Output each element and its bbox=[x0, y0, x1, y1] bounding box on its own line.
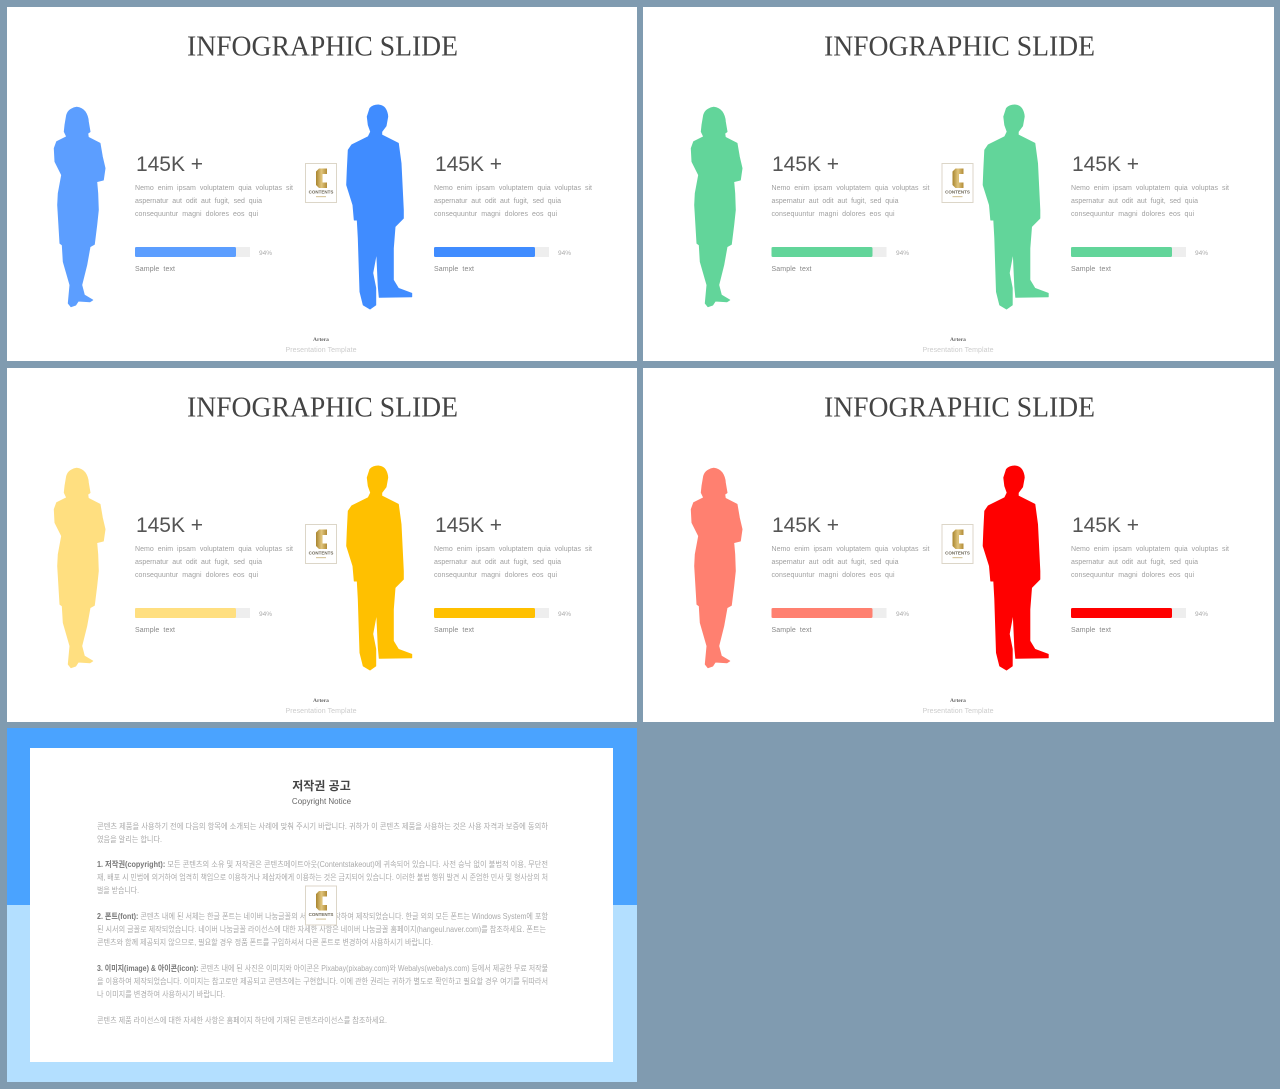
stat block: right: Sample text bbox=[434, 266, 474, 273]
stat block: left: consequuntur magni dolores eos qui bbox=[772, 572, 895, 579]
stat block: right: 94% bbox=[558, 611, 571, 618]
stat block: right: aspernatur aut odit aut fugit, sed quia bbox=[434, 198, 561, 205]
stat block: right: Nemo enim ipsam voluptatem quia voluptas sit bbox=[434, 546, 592, 553]
icon: man silhouette bbox=[347, 105, 412, 309]
icon: woman silhouette bbox=[54, 468, 105, 668]
stat block: left: 145K + bbox=[772, 514, 839, 537]
stat block: left: aspernatur aut odit aut fugit, sed quia bbox=[135, 198, 262, 205]
stat block: right: aspernatur aut odit aut fugit, sed quia bbox=[434, 559, 561, 566]
stat block: left: consequuntur magni dolores eos qui bbox=[135, 211, 258, 218]
stat block: left: aspernatur aut odit aut fugit, sed quia bbox=[135, 559, 262, 566]
stat block: left: Nemo enim ipsam voluptatem quia voluptas sit bbox=[772, 546, 930, 553]
footer: Presentation Template bbox=[286, 708, 357, 715]
icon: man silhouette bbox=[983, 105, 1048, 309]
notice section 3 bbox=[97, 963, 548, 999]
notice section 2: 된 시서의 글꼴로 제작되었습니다. 네이버 나눔글꼴 라이선스에 대한 자세한 사항은 네이버 나눔글꼴 홈페이지(hangeul.naver.com)를 참조하세요. 폰트는 bbox=[97, 924, 546, 934]
notice section 2: 콘텐츠와 함께 제공되지 않으므로, 필요할 경우 정품 폰트를 구입하셔서 다른 폰트로 변경하여 사용하시기 바랍니다. bbox=[97, 937, 433, 947]
title: INFOGRAPHIC SLIDE bbox=[187, 392, 458, 424]
icon: logo bbox=[306, 524, 336, 564]
notice section 3: 을 이용하여 제작되었습니다. 이미지는 참고로만 제공되고 콘텐츠에는 구현합니다. 이에 관한 권리는 귀하가 별도로 확인하고 필요할 경우 여기를 뒤따라서 bbox=[97, 976, 548, 986]
notice section 3: 나 이미지를 변경하여 사용하시기 바랍니다. bbox=[97, 989, 225, 999]
notice intro: 콘텐츠 제품을 사용하기 전에 다음의 항목에 소개되는 사례에 맞춰 주시기 바랍니다. 귀하가 이 콘텐츠 제품을 사용하는 것은 사용 자격과 보증에 동의하 bbox=[97, 821, 549, 831]
stat block: right: 145K + bbox=[435, 514, 502, 537]
stat block: left: aspernatur aut odit aut fugit, sed quia bbox=[772, 559, 899, 566]
notice section 2: 2. 폰트(font): 콘텐츠 내에 된 서체는 한글 폰트는 네이버 나눔글꼴의 서체들로 제작하여 제작되었습니다. 한글 외의 모든 폰트는 Windows System에 포함 bbox=[97, 911, 549, 921]
stat block: right: consequuntur magni dolores eos qui bbox=[434, 572, 557, 579]
icon: logo bbox=[306, 164, 336, 202]
stat block: right: 94% bbox=[1195, 611, 1208, 618]
panel: copyright notice bbox=[7, 728, 637, 1082]
stat block: left: 145K + bbox=[772, 153, 839, 176]
stat block: left: Nemo enim ipsam voluptatem quia voluptas sit bbox=[772, 185, 930, 192]
stat block: right bbox=[1071, 514, 1229, 634]
icon: woman silhouette bbox=[691, 468, 742, 668]
stat block: left bbox=[135, 514, 293, 634]
stat block: left: 145K + bbox=[136, 514, 203, 537]
stat block: left bbox=[772, 153, 930, 273]
stat block: right: Sample text bbox=[434, 627, 474, 634]
stat block: left: 94% bbox=[896, 250, 909, 257]
stat block: right bbox=[434, 153, 592, 273]
title: INFOGRAPHIC SLIDE bbox=[187, 32, 458, 62]
notice subheading: Copyright Notice bbox=[292, 797, 352, 806]
stat block: left: consequuntur magni dolores eos qui bbox=[772, 211, 895, 218]
stat block: right: 145K + bbox=[1072, 514, 1139, 537]
footer: Presentation Template bbox=[922, 347, 994, 354]
footer bbox=[922, 698, 994, 715]
stat block: right: 145K + bbox=[435, 153, 502, 176]
stat block: left: 94% bbox=[259, 250, 272, 257]
stat block: right: 145K + bbox=[1072, 153, 1139, 176]
panel: red slide bbox=[643, 368, 1274, 722]
notice section 1: 1. 저작권(copyright): 모든 콘텐츠의 소유 및 저작권은 콘텐츠메이트아웃(Contentstakeout)에 귀속되어 있습니다. 사전 승낙 없이 불법적 이용, 무단전 bbox=[97, 859, 548, 869]
stat block: right: aspernatur aut odit aut fugit, sed quia bbox=[1071, 559, 1198, 566]
stat block: right bbox=[1071, 153, 1229, 273]
stat block: right: aspernatur aut odit aut fugit, sed quia bbox=[1071, 198, 1198, 205]
panel: yellow slide bbox=[7, 368, 637, 722]
footer: Artera bbox=[950, 698, 966, 704]
notice section 2 bbox=[97, 911, 549, 947]
notice section 1: 재, 배포 시 민법에 의거하여 엄격히 책임으로 이용하거나 제삼자에게 이용하는 것은 금지되어 있습니다. 이러한 불법 행위 발견 시 준엄한 민사 및 형사상의 처 bbox=[97, 872, 548, 882]
icon: logo bbox=[306, 886, 336, 925]
stat block: right: 94% bbox=[1195, 250, 1208, 257]
stat block: left: Nemo enim ipsam voluptatem quia voluptas sit bbox=[135, 546, 293, 553]
footer: Artera bbox=[950, 337, 966, 343]
stat block: right bbox=[434, 514, 592, 634]
stat block: right: consequuntur magni dolores eos qui bbox=[1071, 572, 1194, 579]
icon: logo bbox=[942, 164, 973, 202]
notice intro: 였음을 알리는 합니다. bbox=[97, 834, 162, 844]
stat block: right: Sample text bbox=[1071, 266, 1111, 273]
icon: woman silhouette bbox=[54, 107, 105, 307]
icon: logo bbox=[942, 524, 973, 564]
footer: Presentation Template bbox=[286, 347, 357, 354]
icon: man silhouette bbox=[347, 466, 412, 670]
stat block: left: 94% bbox=[259, 611, 272, 618]
stat block: left: 94% bbox=[896, 611, 909, 618]
panel: green slide bbox=[643, 7, 1274, 361]
stat block: right: Sample text bbox=[1071, 627, 1111, 634]
title: INFOGRAPHIC SLIDE bbox=[824, 32, 1095, 62]
stat block: right: Nemo enim ipsam voluptatem quia voluptas sit bbox=[1071, 185, 1229, 192]
footer bbox=[922, 337, 994, 354]
notice section 1 bbox=[97, 859, 548, 895]
stat block: right: Nemo enim ipsam voluptatem quia voluptas sit bbox=[1071, 546, 1229, 553]
stat block: right: Nemo enim ipsam voluptatem quia voluptas sit bbox=[434, 185, 592, 192]
stat block: left: Sample text bbox=[772, 627, 812, 634]
notice heading: 저작권 공고 bbox=[292, 778, 351, 793]
panel: blue slide bbox=[7, 7, 637, 361]
footer: Presentation Template bbox=[922, 708, 994, 715]
stat block: left: consequuntur magni dolores eos qui bbox=[135, 572, 258, 579]
stat block: left: Sample text bbox=[135, 266, 175, 273]
stat block: left: Nemo enim ipsam voluptatem quia voluptas sit bbox=[135, 185, 293, 192]
footer bbox=[286, 337, 357, 354]
stat block: left: aspernatur aut odit aut fugit, sed quia bbox=[772, 198, 899, 205]
icon: woman silhouette bbox=[691, 107, 742, 307]
footer bbox=[286, 698, 357, 715]
stat block: left bbox=[772, 514, 930, 634]
notice section 1: 벌을 받습니다. bbox=[97, 885, 139, 895]
stat block: left bbox=[135, 153, 293, 273]
stat block: right: consequuntur magni dolores eos qui bbox=[434, 211, 557, 218]
footer: Artera bbox=[313, 337, 329, 343]
title: INFOGRAPHIC SLIDE bbox=[824, 392, 1095, 424]
stat block: left: 145K + bbox=[136, 153, 203, 176]
stat block: left: Sample text bbox=[772, 266, 812, 273]
notice intro bbox=[97, 821, 549, 844]
notice closing line: 콘텐츠 제품 라이선스에 대한 자세한 사항은 홈페이지 하단에 기재된 콘텐츠라이선스를 참조하세요. bbox=[97, 1015, 387, 1025]
icon: man silhouette bbox=[983, 466, 1048, 670]
stat block: left: Sample text bbox=[135, 627, 175, 634]
stat block: right: consequuntur magni dolores eos qui bbox=[1071, 211, 1194, 218]
footer: Artera bbox=[313, 698, 329, 704]
stat block: right: 94% bbox=[558, 250, 571, 257]
notice section 3: 3. 이미지(image) & 아이콘(icon): 콘텐츠 내에 된 사진은 이미지와 아이콘은 Pixabay(pixabay.com)와 Webalys(webalys.com) 등에서 제공한 무료 저작물 bbox=[97, 963, 548, 973]
